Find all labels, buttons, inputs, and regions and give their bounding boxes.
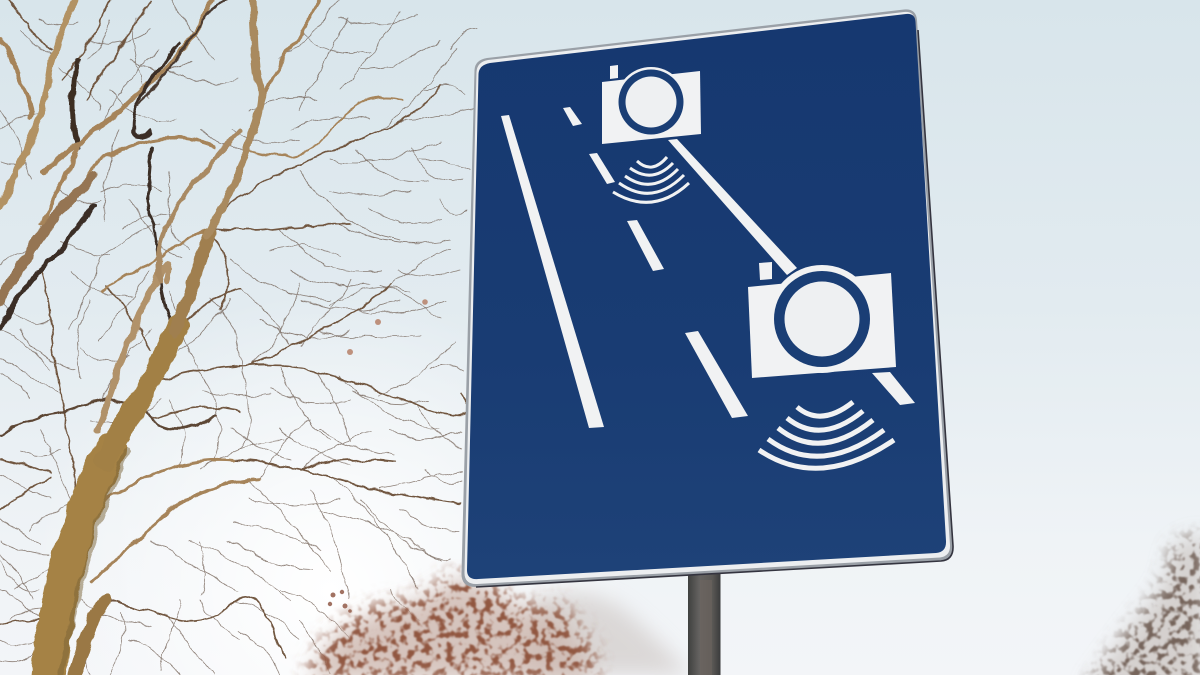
left road edge line [501,115,604,428]
distant reddish tree at bottom centre [305,571,690,675]
sign post [688,572,720,675]
lane dash 1 [563,107,582,126]
main trunk [48,0,261,675]
medium branches [0,0,469,660]
icon: large radar waves [759,402,894,468]
road sign [461,9,953,587]
distant bare tree at bottom right [1085,535,1200,675]
bare tree on left [0,0,480,675]
sign frame [461,9,953,587]
icon: small camera [602,65,701,144]
lane dash 4 [685,331,748,418]
leaf clusters on branches [328,299,428,613]
blue sign panel [467,14,946,579]
road edge and lane markings [501,107,915,428]
icon: large camera [748,262,896,378]
icon: small radar waves [613,157,689,202]
right road line upper [668,139,797,275]
lane dash 2 [589,153,615,184]
main boughs [0,0,400,582]
right road line lower [872,372,915,405]
fine twigs [0,0,480,675]
lane dash 3 [627,220,664,271]
